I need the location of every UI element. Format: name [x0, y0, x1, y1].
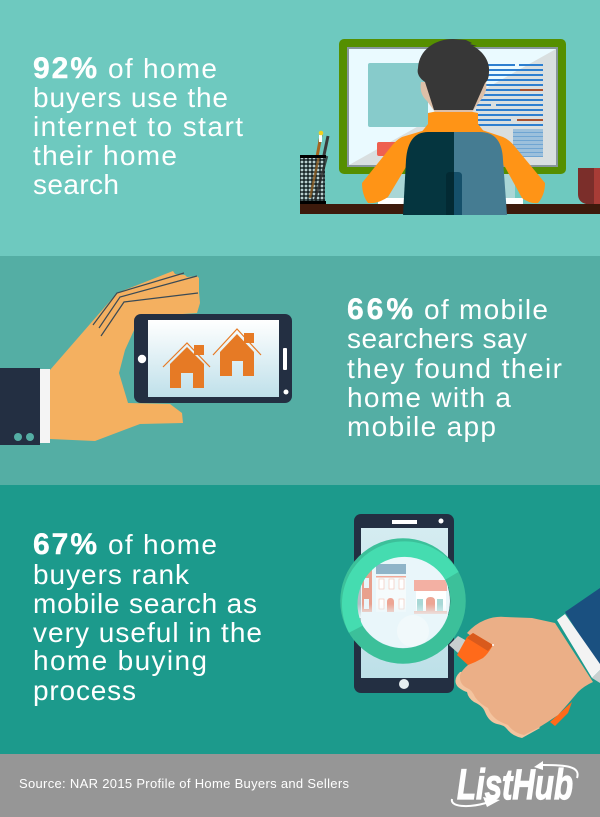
- icon: hand holding phone: [0, 271, 292, 445]
- heading: 66% statistic: of mobile: [424, 294, 548, 325]
- heading: 67% statistic: 67%: [33, 528, 97, 561]
- heading: 92% statistic: their home: [33, 140, 177, 171]
- icon: magnifying glass: [348, 546, 467, 656]
- panel: mobile app: [0, 256, 600, 485]
- heading: 67% statistic: home buying: [33, 645, 207, 676]
- heading: 66% statistic: mobile app: [347, 411, 496, 442]
- heading: 92% statistic: internet to start: [33, 111, 243, 142]
- icon: magnifying glass grip: [457, 633, 494, 665]
- icon: phone with houses: [134, 314, 292, 403]
- heading: 92% statistic: 92%: [33, 52, 97, 85]
- heading: 67% statistic: very useful in the: [33, 617, 262, 648]
- heading: 66% statistic: [347, 293, 562, 442]
- source note: Source: NAR 2015 Profile of Home Buyers and Sellers: [19, 776, 350, 791]
- heading: 92% statistic: [33, 52, 243, 200]
- heading: 67% statistic: of home: [108, 529, 217, 560]
- heading: 66% statistic: 66%: [347, 293, 413, 326]
- heading: 67% statistic: process: [33, 675, 136, 706]
- heading: 92% statistic: of home: [108, 53, 217, 84]
- heading: 66% statistic: searchers say: [347, 323, 527, 354]
- heading: 66% statistic: home with a: [347, 382, 511, 413]
- icon: desk and monitor: [300, 39, 600, 214]
- heading: 67% statistic: [33, 528, 262, 706]
- icon: person at computer: [362, 39, 545, 215]
- heading: 67% statistic: mobile search as: [33, 588, 257, 619]
- icon: pencil holder: [300, 131, 328, 204]
- icon: coffee mug: [578, 168, 600, 204]
- panel: footer: [0, 754, 600, 817]
- heading: 92% statistic: buyers use the: [33, 82, 228, 113]
- panel: mobile search: [0, 485, 600, 754]
- heading: 67% statistic: buyers rank: [33, 559, 190, 590]
- heading: 66% statistic: they found their: [347, 353, 562, 384]
- heading: 92% statistic: search: [33, 169, 119, 200]
- icon: hand and sleeve: [455, 588, 600, 738]
- icon: smartphone: [354, 514, 454, 693]
- panel: internet search: [0, 0, 600, 256]
